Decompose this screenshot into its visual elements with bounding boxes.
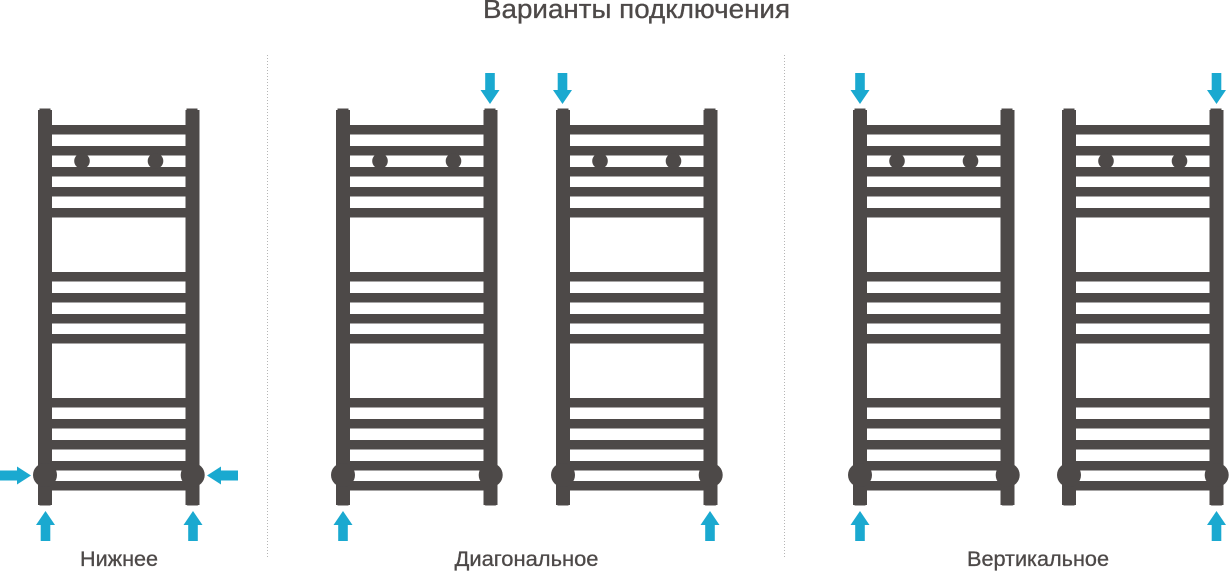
label: diagonal connection: Диагональное bbox=[454, 548, 598, 571]
arrow: right bottom inlet bbox=[184, 511, 202, 541]
arrow: left side inlet bbox=[0, 466, 31, 484]
arrow: left bottom inlet bbox=[36, 511, 55, 541]
panel: diagonal connection bbox=[331, 73, 723, 571]
arrow: radiator 2 bottom left bbox=[334, 511, 352, 541]
arrow: radiator 3 top left bbox=[553, 73, 572, 104]
label: vertical connection: Вертикальное bbox=[967, 548, 1109, 571]
arrow: radiator 4 bottom left bbox=[850, 511, 870, 541]
arrow: radiator 5 top right bbox=[1207, 73, 1226, 104]
arrow: radiator 4 top left bbox=[850, 73, 870, 104]
arrow: right side inlet bbox=[207, 466, 238, 484]
radiator 5 bbox=[1057, 108, 1229, 506]
panel: bottom connection bbox=[0, 108, 238, 571]
radiator 1 bbox=[33, 108, 205, 506]
label: bottom connection: Нижнее bbox=[80, 548, 158, 571]
divider bbox=[266, 55, 268, 558]
arrow: radiator 5 bottom right bbox=[1207, 511, 1226, 541]
arrow: radiator 3 bottom right bbox=[700, 511, 720, 541]
panel: vertical connection bbox=[848, 73, 1229, 571]
arrow: radiator 2 top right bbox=[480, 73, 500, 104]
radiator 4 bbox=[848, 108, 1020, 506]
radiator 3 bbox=[551, 108, 723, 506]
radiator 2 bbox=[331, 108, 503, 506]
